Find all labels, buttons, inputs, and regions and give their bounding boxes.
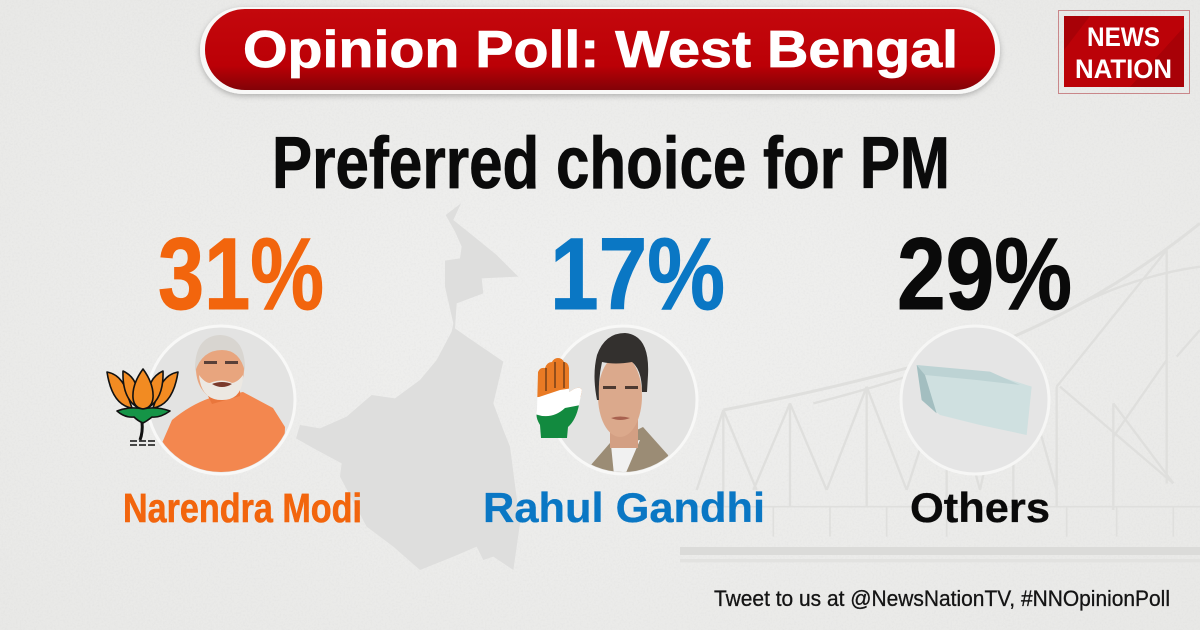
panel: Narendra Modi	[107, 217, 362, 531]
icon: Gandhi cap	[917, 365, 1032, 435]
background bridge illustration	[680, 223, 1200, 561]
panel: Rahul Gandhi	[486, 238, 762, 523]
percentage: 31%: 31%	[158, 217, 324, 331]
News Nation logo: NATION	[1075, 54, 1172, 84]
label: Rahul Gandhi: Rahul Gandhi	[483, 484, 765, 531]
icon: BJP lotus	[107, 369, 178, 445]
portrait: Rahul Gandhi	[549, 326, 697, 480]
label: Others: Others	[910, 484, 1050, 531]
portrait: white cap	[901, 326, 1049, 474]
title banner	[200, 7, 1000, 94]
footer text: Tweet to us at @NewsNationTV, #NNOpinionPoll	[714, 586, 1170, 611]
background map: West Bengal	[296, 203, 520, 570]
icon: Congress hand	[536, 358, 582, 438]
panel: Others	[897, 217, 1072, 531]
heading: Preferred choice for PM	[272, 123, 950, 204]
percentage: 29%: 29%	[897, 217, 1072, 331]
News Nation logo	[1058, 10, 1190, 94]
title text: Opinion Poll: West Bengal	[243, 21, 958, 79]
label: Narendra Modi: Narendra Modi	[123, 485, 362, 531]
portrait: Narendra Modi	[147, 326, 295, 480]
percentage: 17%: 17%	[550, 217, 725, 331]
logo text: NEWS	[1087, 22, 1160, 52]
